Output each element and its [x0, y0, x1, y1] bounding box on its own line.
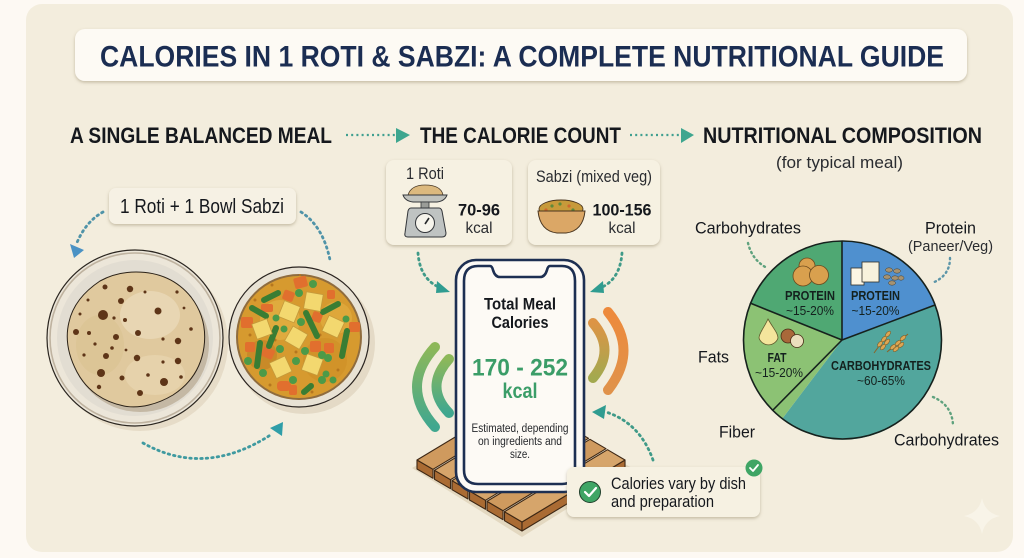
pie label: carbohydrates top: [695, 220, 801, 268]
pie chart: [743, 241, 942, 440]
card: 1 roti: 70-96: [458, 202, 500, 220]
arrow: label to roti: [70, 212, 103, 258]
labels inside pie: ~15-20%: [755, 366, 803, 380]
card: 1 roti: 1 Roti: [406, 165, 444, 183]
callout: 1 roti + 1 bowl sabzi: [109, 188, 296, 224]
icon: badge check: [746, 460, 762, 476]
calorie range: 170 - 252: [472, 354, 568, 382]
card: sabzi: Sabzi (mixed veg): [536, 168, 652, 186]
icon: check: [580, 482, 600, 502]
signal arcs right: [593, 312, 624, 390]
sabzi bowl: [229, 267, 375, 414]
icon: oil drop and nuts: [759, 319, 804, 348]
pie outlines: [744, 241, 942, 439]
pie label: carbohydrates bottom: Carbohydrates: [894, 432, 999, 450]
arrow: note to phone: [592, 405, 653, 460]
arrow: roti to total: [418, 253, 450, 293]
card: sabzi: [528, 160, 660, 245]
pie label: carbohydrates top: Carbohydrates: [695, 220, 801, 238]
card: 1 roti: kcal: [466, 220, 492, 237]
card: 1 roti: [386, 160, 512, 245]
carrots: [241, 275, 360, 395]
labels inside pie: CARBOHYDRATES: [831, 359, 931, 373]
phone: [456, 260, 584, 492]
bowl: [229, 267, 375, 414]
arrow: roti to bowl: [143, 422, 283, 459]
paneer cubes: [252, 292, 345, 379]
title: [75, 29, 967, 81]
total meal calories label: Calories: [492, 313, 548, 332]
total meal calories label: Total Meal: [484, 294, 556, 314]
green beans: [252, 293, 347, 392]
callout: 1 roti + 1 bowl sabzi: 1 Roti + 1 Bowl Sabzi: [120, 196, 284, 218]
icon: kitchen scale with roti: [403, 185, 447, 237]
heading: nutritional composition: (for typical meal): [776, 153, 903, 172]
slice: blue protein: [842, 241, 935, 340]
callout: calories vary: and preparation: [611, 493, 714, 511]
estimate note: on ingredients and: [478, 436, 562, 448]
calorie range: [472, 354, 568, 403]
card: sabzi: kcal: [608, 220, 636, 237]
slice: carbohydrates: [782, 305, 942, 440]
roti: [67, 272, 205, 407]
icon: paneer and seeds: [851, 262, 904, 285]
card: sabzi: 100-156: [592, 202, 652, 220]
heading: nutritional composition: [703, 123, 982, 172]
arrow: calorie count to composition: [630, 128, 694, 143]
icon: wheat: [874, 330, 908, 353]
callout: calories vary: Calories vary by dish: [611, 475, 746, 493]
estimate note: [472, 423, 568, 461]
pie label: protein: Protein: [925, 220, 976, 238]
pie label: fats: Fats: [698, 348, 729, 366]
callout: calories vary: [567, 460, 762, 517]
wooden platform: [412, 398, 632, 537]
pie label: protein: (Paneer/Veg): [908, 238, 993, 255]
estimate note: size.: [510, 449, 530, 461]
roti on plate: [47, 250, 228, 431]
slice: fat: [743, 303, 842, 410]
heading: a single balanced meal: A SINGLE BALANCED MEAL: [70, 123, 332, 148]
heading: nutritional composition: NUTRITIONAL COMPOSITION: [703, 123, 982, 148]
calorie range: kcal: [502, 380, 538, 403]
peas: [244, 280, 350, 384]
labels inside pie: [755, 289, 931, 388]
curry base: [238, 274, 360, 398]
labels inside pie: PROTEIN: [785, 289, 835, 303]
pie label: carbohydrates bottom: [894, 397, 999, 450]
labels inside pie: PROTEIN: [851, 289, 900, 303]
heading: the calorie count: THE CALORIE COUNT: [420, 123, 621, 148]
slice: fiber: [773, 340, 842, 419]
estimate note: Estimated, depending: [472, 423, 568, 435]
labels inside pie: FAT: [768, 351, 787, 365]
pie label: fiber: Fiber: [719, 424, 755, 442]
arrow: sabzi to total: [590, 253, 622, 293]
signal arcs left: [417, 347, 449, 427]
arrow: bowl to label: [301, 212, 330, 260]
plate: [47, 250, 228, 431]
labels inside pie: ~60-65%: [857, 374, 905, 388]
icon: potatoes: [793, 258, 828, 286]
icon: bowl of sabzi: [538, 200, 585, 233]
slice: green protein: [750, 241, 842, 340]
arrow: meal to calorie count: [346, 128, 410, 143]
labels inside pie: ~15-20%: [852, 304, 900, 318]
total meal calories label: [484, 294, 556, 332]
pie label: protein: [908, 220, 993, 283]
sparkle watermark: [964, 498, 1000, 534]
labels inside pie: ~15-20%: [786, 304, 834, 318]
